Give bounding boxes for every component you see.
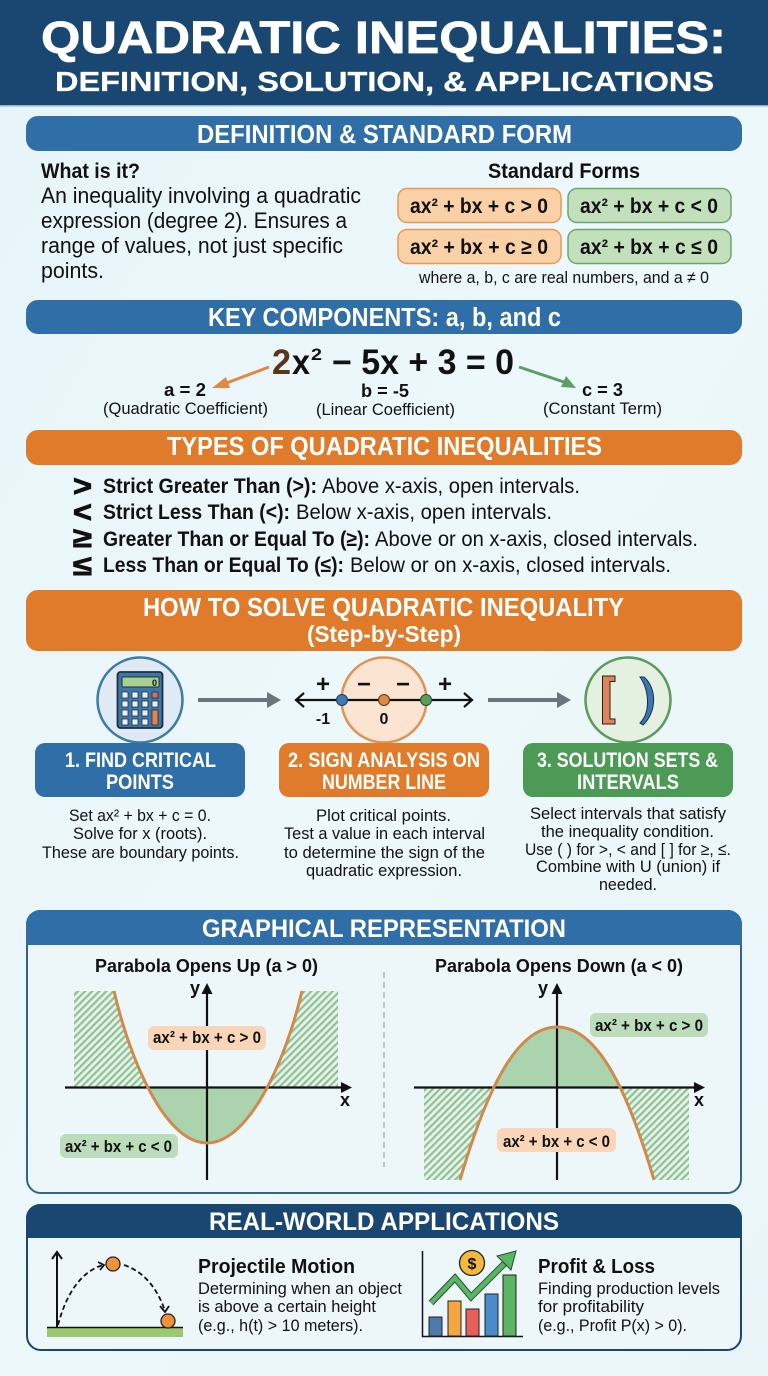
arrow: to a bbox=[212, 367, 269, 388]
text block: projectile motion: Projectile Motion bbox=[198, 1256, 355, 1278]
list item: strict greater: > bbox=[73, 470, 92, 503]
chart: parabola opens down bbox=[414, 955, 708, 1180]
panel: key components bbox=[26, 300, 742, 419]
list item: greater or equal: Above or on x-axis, closed intervals. bbox=[375, 528, 698, 551]
heading: applications bbox=[26, 1204, 742, 1238]
text block: projectile motion bbox=[198, 1256, 402, 1335]
text block: what is it: range of values, not just specific bbox=[41, 233, 343, 258]
step 2 description: Plot critical points. bbox=[316, 806, 451, 825]
heading: graphical representation bbox=[26, 910, 742, 945]
heading: graphical representation: GRAPHICAL REPRESENTATION bbox=[202, 915, 566, 943]
standard forms: ax² + bx + c < 0 bbox=[580, 195, 718, 218]
standard forms: ax² + bx + c > 0 bbox=[410, 195, 548, 218]
list item: strict greater bbox=[73, 470, 580, 503]
icon: calculator: 0 bbox=[152, 678, 157, 688]
icon: sign number line: − bbox=[396, 671, 410, 698]
chart: parabola opens down: ax² + bx + c < 0 bbox=[503, 1133, 610, 1151]
chart: parabola opens up: x bbox=[340, 1090, 350, 1110]
arrow: step 2 to 3 bbox=[488, 692, 571, 708]
step 1 description bbox=[42, 806, 239, 862]
panel: graphical representation bbox=[26, 910, 742, 1193]
text block: profit and loss: Finding production levels bbox=[538, 1280, 720, 1298]
equation: 2 bbox=[272, 343, 291, 382]
label: a bbox=[103, 380, 268, 418]
icon: sign number line: -1 bbox=[316, 711, 330, 728]
step 1 description: These are boundary points. bbox=[42, 843, 239, 862]
chart: parabola opens up: y bbox=[190, 978, 200, 998]
list item: greater or equal: ≥ bbox=[73, 522, 92, 553]
icon: profit chart bbox=[422, 1250, 523, 1336]
equation: x bbox=[292, 343, 310, 382]
label: c: (Constant Term) bbox=[543, 400, 662, 418]
chart: parabola opens up: ax² + bx + c > 0 bbox=[153, 1029, 261, 1047]
step 3 description: Combine with U (union) if bbox=[536, 857, 720, 876]
list item: strict less: < bbox=[73, 496, 92, 529]
step 1 description: Solve for x (roots). bbox=[73, 824, 207, 843]
panel: real-world applications bbox=[26, 1204, 742, 1350]
standard forms: ax² + bx + c ≤ 0 bbox=[580, 236, 718, 259]
chart: parabola opens up bbox=[60, 955, 352, 1180]
standard forms bbox=[398, 160, 731, 287]
text block: profit and loss: Profit & Loss bbox=[538, 1256, 655, 1278]
standard forms: Standard Forms bbox=[488, 160, 640, 183]
list item: strict greater: Strict Greater Than (>): bbox=[103, 475, 317, 498]
step 3 label: 3. SOLUTION SETS & bbox=[537, 749, 718, 772]
icon: profit chart: $ bbox=[468, 1256, 477, 1273]
step 2 label bbox=[279, 743, 489, 797]
arrow: step 1 to 2 bbox=[198, 692, 281, 708]
heading: how to solve: HOW TO SOLVE QUADRATIC INEQUALITY bbox=[143, 594, 624, 622]
heading: key components: KEY COMPONENTS: a, b, and c bbox=[208, 304, 561, 332]
step 3 description: the inequality condition. bbox=[541, 822, 714, 841]
step 2 description: to determine the sign of the bbox=[284, 843, 485, 862]
label: c bbox=[543, 380, 662, 418]
icon: sign number line: 0 bbox=[380, 711, 389, 728]
step 3 label: INTERVALS bbox=[577, 771, 679, 794]
equation: 2 bbox=[311, 345, 322, 364]
list item: greater or equal: Greater Than or Equal To (≥): bbox=[103, 528, 370, 551]
icon: interval brackets bbox=[586, 658, 670, 742]
list item: strict less: Strict Less Than (<): bbox=[103, 501, 290, 524]
text block: profit and loss: for profitability bbox=[538, 1298, 645, 1316]
text block: what is it: points. bbox=[41, 258, 104, 283]
step 1 label bbox=[35, 743, 245, 797]
list item: less or equal: Below or on x-axis, closed intervals. bbox=[350, 554, 671, 577]
title banner bbox=[0, 0, 768, 106]
standard forms: where a, b, c are real numbers, and a ≠ 0 bbox=[418, 268, 709, 287]
step 3 description: Use ( ) for >, < and [ ] for ≥, ≤. bbox=[525, 840, 731, 859]
heading: how to solve: (Step-by-Step) bbox=[307, 621, 461, 647]
chart: parabola opens up: ax² + bx + c < 0 bbox=[65, 1138, 172, 1156]
icon: sign number line: − bbox=[357, 671, 371, 698]
step 3 description bbox=[525, 804, 731, 894]
icon: sign number line bbox=[296, 658, 472, 742]
standard forms: ax² + bx + c ≥ 0 bbox=[410, 236, 548, 259]
heading: definition: DEFINITION & STANDARD FORM bbox=[197, 121, 572, 149]
chart: parabola opens down: Parabola Opens Down (a < 0) bbox=[435, 955, 683, 976]
text block: profit and loss: (e.g., Profit P(x) > 0). bbox=[538, 1317, 687, 1335]
chart: parabola opens down: x bbox=[694, 1090, 704, 1110]
arrow: to c bbox=[519, 367, 576, 388]
step 2 description: quadratic expression. bbox=[306, 861, 462, 880]
step 3 bbox=[523, 743, 733, 894]
step 3 description: needed. bbox=[599, 875, 657, 894]
step 1 description: Set ax² + bx + c = 0. bbox=[69, 806, 211, 825]
heading: key components bbox=[26, 300, 742, 334]
chart: parabola opens up: Parabola Opens Up (a > 0) bbox=[95, 955, 318, 976]
text block: projectile motion: (e.g., h(t) > 10 meters). bbox=[198, 1317, 363, 1335]
heading: definition bbox=[26, 116, 742, 151]
label: a: (Quadratic Coefficient) bbox=[103, 400, 268, 418]
step 1 bbox=[35, 743, 245, 862]
chart: parabola opens down: y bbox=[538, 978, 548, 998]
text block: profit and loss bbox=[538, 1256, 720, 1335]
step 2 description bbox=[284, 806, 485, 880]
list item: greater or equal bbox=[73, 522, 698, 553]
step 1 label: POINTS bbox=[106, 771, 174, 794]
text block: what is it: An inequality involving a quadratic bbox=[41, 183, 361, 208]
step 2 description: Test a value in each interval bbox=[284, 824, 485, 843]
text block: what is it bbox=[41, 160, 361, 283]
text block: what is it: What is it? bbox=[41, 160, 140, 183]
list item: strict less: Below x-axis, open intervals. bbox=[296, 501, 552, 524]
heading: how to solve bbox=[26, 590, 742, 651]
step 2 label: NUMBER LINE bbox=[322, 771, 446, 794]
title banner: QUADRATIC INEQUALITIES: bbox=[41, 12, 726, 63]
label: b: (Linear Coefficient) bbox=[316, 401, 455, 419]
heading: types bbox=[26, 430, 742, 465]
step 3 label bbox=[523, 743, 733, 797]
list item: less or equal bbox=[73, 550, 671, 581]
label: b: b = -5 bbox=[361, 381, 409, 401]
panel: definition and standard form bbox=[26, 116, 742, 287]
label: b bbox=[316, 381, 455, 419]
list item: less or equal: Less Than or Equal To (≤): bbox=[103, 554, 344, 577]
step 1 label: 1. FIND CRITICAL bbox=[65, 749, 216, 772]
heading: types: TYPES OF QUADRATIC INEQUALITIES bbox=[167, 433, 602, 461]
icon: calculator bbox=[98, 658, 182, 742]
text block: projectile motion: is above a certain height bbox=[198, 1298, 376, 1316]
icon: sign number line: + bbox=[438, 671, 452, 698]
chart: parabola opens down: ax² + bx + c > 0 bbox=[595, 1017, 703, 1035]
panel: how to solve bbox=[26, 590, 742, 894]
step 2 label: 2. SIGN ANALYSIS ON bbox=[288, 749, 480, 772]
icon: projectile bbox=[47, 1252, 183, 1337]
list item: less or equal: ≤ bbox=[73, 550, 92, 581]
text block: projectile motion: Determining when an object bbox=[198, 1280, 402, 1298]
label: a: a = 2 bbox=[164, 380, 206, 400]
text block: what is it: expression (degree 2). Ensures a bbox=[41, 208, 348, 233]
step 2 bbox=[279, 743, 489, 880]
equation: − 5x + 3 = 0 bbox=[332, 343, 514, 382]
title banner: DEFINITION, SOLUTION, & APPLICATIONS bbox=[55, 66, 714, 97]
label: c: c = 3 bbox=[582, 380, 623, 400]
panel: types of inequalities bbox=[26, 430, 742, 581]
heading: applications: REAL-WORLD APPLICATIONS bbox=[209, 1208, 559, 1236]
list item: strict less bbox=[73, 496, 552, 529]
list item: strict greater: Above x-axis, open intervals. bbox=[322, 475, 580, 498]
step 3 description: Select intervals that satisfy bbox=[530, 804, 726, 823]
icon: sign number line: + bbox=[316, 671, 330, 698]
